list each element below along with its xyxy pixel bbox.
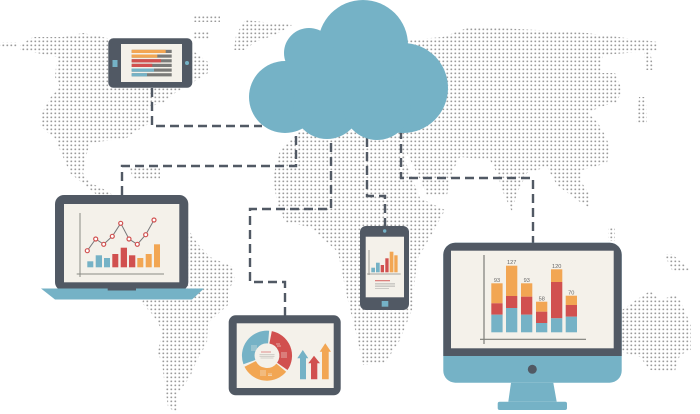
stacked bar chart: 58: [539, 296, 545, 302]
device: desktop monitor with stacked bars: [443, 243, 622, 410]
stacked bar chart: 120: [552, 264, 561, 270]
stacked bar chart: [491, 260, 577, 332]
arrow: blue: [297, 350, 308, 379]
device: landscape tablet with bar list: [108, 38, 192, 88]
connector: phone to cloud: [367, 135, 385, 227]
connector: laptop to cloud: [122, 130, 296, 195]
connector: monitor to cloud: [401, 130, 533, 243]
connector: tablet to cloud: [152, 88, 262, 126]
device: laptop with line and bar chart: [41, 195, 204, 300]
arrow: orange: [320, 343, 331, 379]
stacked bar chart: 93: [494, 278, 500, 284]
connector: presentation tablet to cloud: [250, 135, 331, 316]
device: tablet with donut and arrows: [229, 315, 341, 395]
stacked bar chart: 93: [524, 278, 530, 284]
stacked bar chart: 70: [568, 290, 574, 296]
device: phone with bar chart: [360, 226, 409, 310]
arrow: red: [308, 356, 320, 379]
icon: cloud: [249, 0, 448, 140]
stacked bar chart: 127: [507, 260, 516, 266]
donut chart: [248, 337, 287, 376]
